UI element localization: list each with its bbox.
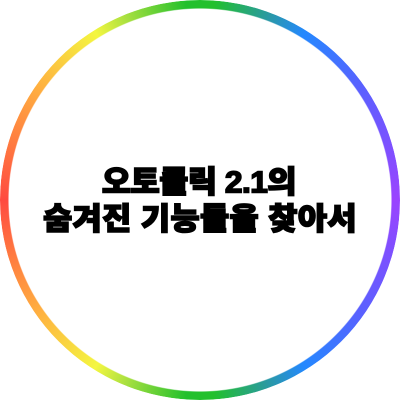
title line 2: 숨겨진 기능들을 찾아서 [43, 202, 357, 236]
title [43, 165, 357, 236]
title line 1: 오토클릭 2.1의 [102, 165, 296, 199]
